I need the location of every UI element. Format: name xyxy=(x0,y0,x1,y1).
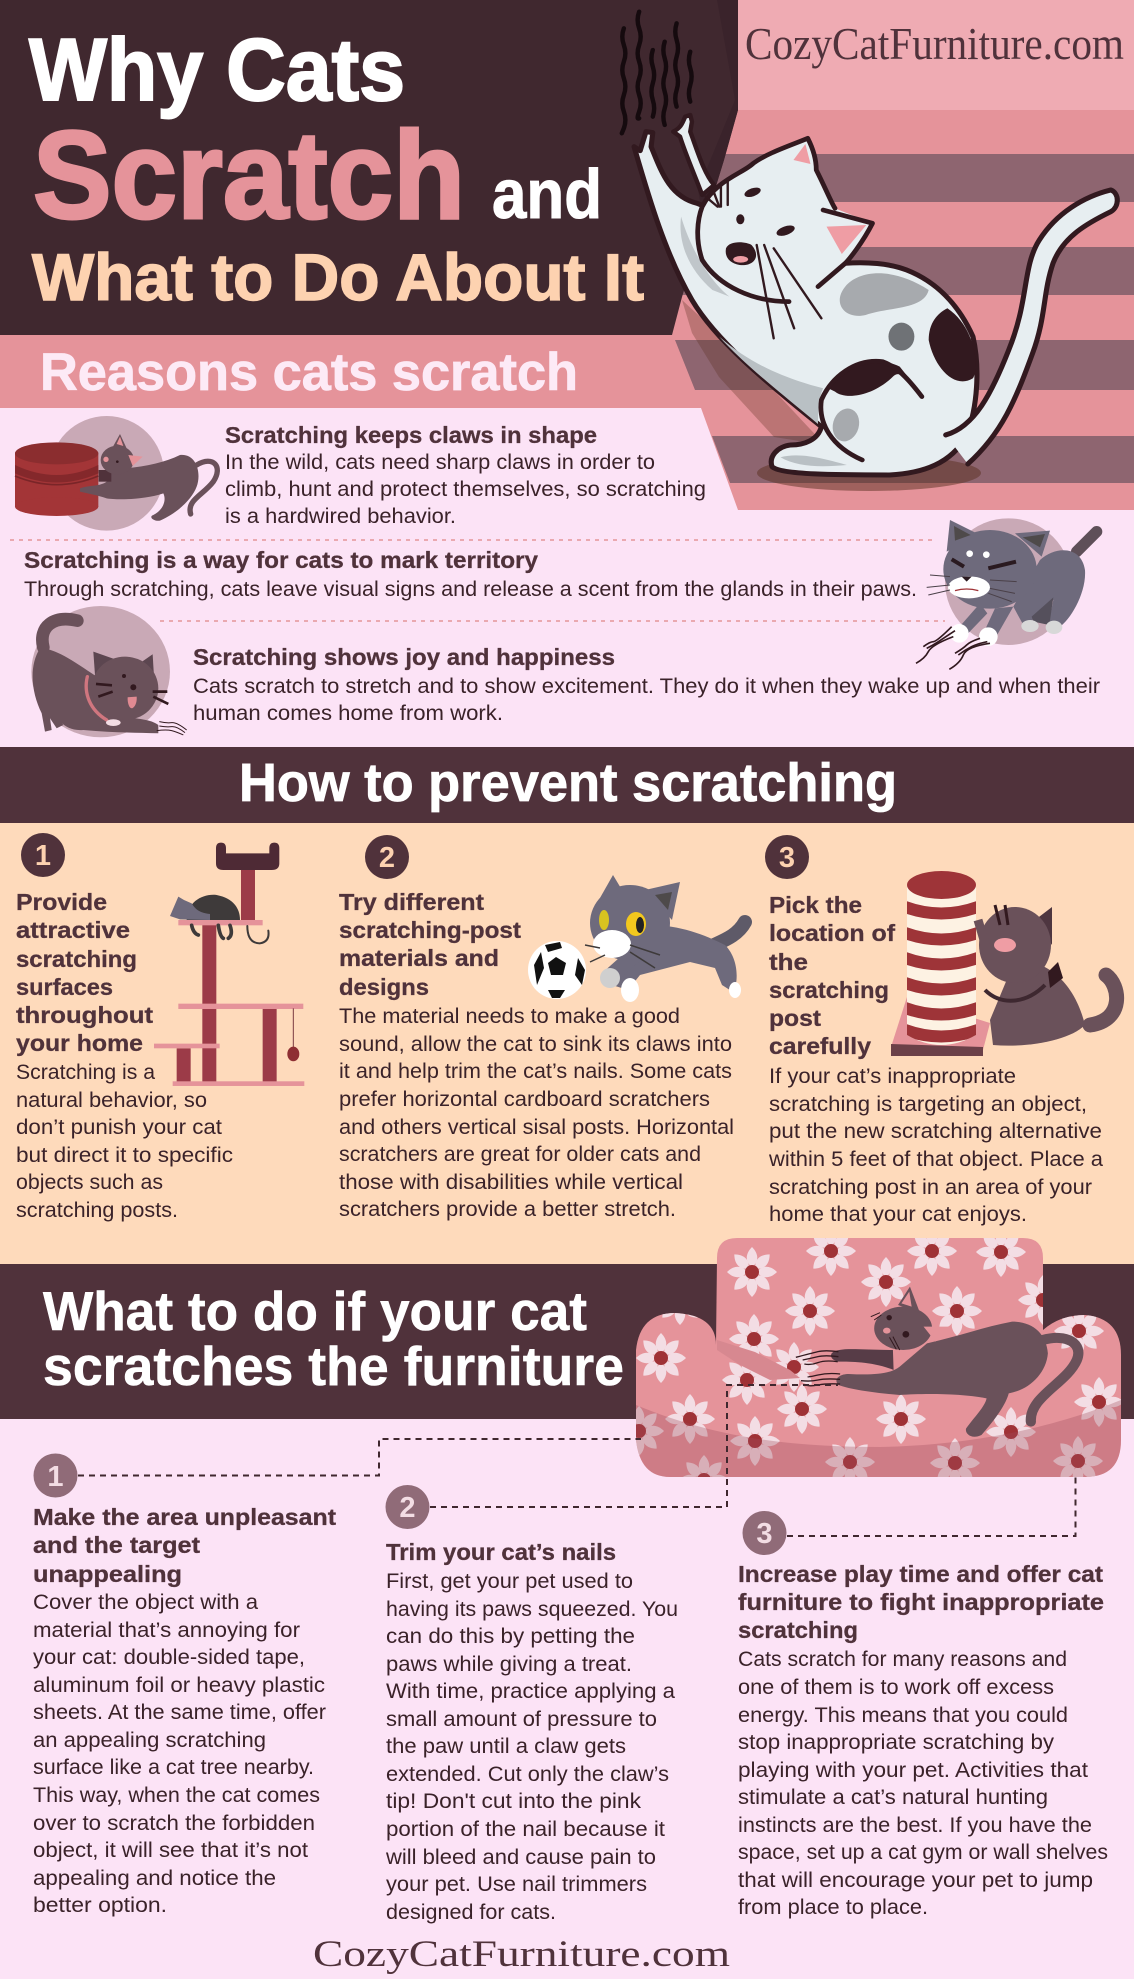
reason 3: joy and happiness xyxy=(31,606,1100,737)
heading: your home xyxy=(16,1030,143,1056)
heading: post xyxy=(769,1005,821,1031)
body text: designed for cats. xyxy=(386,1901,556,1924)
body text: human comes home from work. xyxy=(193,702,503,725)
body text: can do this by petting the xyxy=(386,1625,635,1648)
title line: and: and xyxy=(492,155,602,233)
body text: stimulate a cat’s natural hunting xyxy=(738,1786,1048,1809)
step 1: attractive surfaces xyxy=(16,833,304,1222)
number badge: 2 xyxy=(399,1492,416,1524)
back leg line xyxy=(821,361,922,460)
body text: your pet. Use nail trimmers xyxy=(386,1873,647,1896)
number badge: 3 xyxy=(756,1518,773,1550)
icon: cat scratching sofa xyxy=(796,1287,1078,1437)
body text xyxy=(225,451,706,528)
step 3: location of post xyxy=(765,835,1117,1226)
body text: stop inappropriate scratching by xyxy=(738,1731,1055,1754)
heading: Make the area unpleasant xyxy=(33,1504,336,1530)
body text: scratchers provide a better stretch. xyxy=(339,1198,676,1221)
heading xyxy=(738,1561,1104,1643)
icon: striped scratching post xyxy=(891,871,990,1056)
body text: but direct it to specific xyxy=(16,1144,233,1167)
body shading xyxy=(680,217,729,297)
body text xyxy=(339,1005,734,1221)
body text: one of them is to work off excess xyxy=(738,1676,1054,1699)
heading: carefully xyxy=(769,1033,871,1059)
body text: those with disabilities while vertical xyxy=(339,1171,683,1194)
header dark panel xyxy=(0,0,738,335)
heading xyxy=(339,889,521,1000)
body text: prefer horizontal cardboard scratchers xyxy=(339,1088,710,1111)
step 3: play time and furniture xyxy=(738,1511,1108,1919)
step 2: trim nails xyxy=(385,1485,678,1924)
heading: Scratching shows joy and happiness xyxy=(193,644,615,670)
icon: grey cat pouncing with claws xyxy=(916,518,1097,669)
body text: extended. Cut only the claw’s xyxy=(386,1763,669,1786)
body text: home that your cat enjoys. xyxy=(769,1203,1027,1226)
body text: portion of the nail because it xyxy=(386,1818,665,1841)
heading: Try different xyxy=(339,889,484,915)
number badge xyxy=(34,1454,78,1498)
body text: With time, practice applying a xyxy=(386,1680,675,1703)
body text: from place to place. xyxy=(738,1896,928,1919)
site name footer: CozyCatFurniture.com xyxy=(313,1934,730,1975)
heading: scratches the furniture xyxy=(43,1335,624,1397)
body text xyxy=(16,1061,233,1222)
whiskers xyxy=(706,182,821,338)
heading: location of xyxy=(769,920,895,946)
icon: stretching cat xyxy=(31,606,187,737)
body text: put the new scratching alternative xyxy=(769,1120,1102,1143)
body text: First, get your pet used to xyxy=(386,1570,633,1593)
body text: Cover the object with a xyxy=(33,1591,258,1614)
body text: objects such as xyxy=(16,1171,163,1194)
icon: grey cat chasing ball xyxy=(585,875,745,1002)
body text: appealing and notice the xyxy=(33,1867,276,1890)
body text: object, it will see that it’s not xyxy=(33,1839,308,1862)
body text: having its paws squeezed. You xyxy=(386,1598,678,1621)
connector: dashed lines to sofa xyxy=(78,1385,1076,1536)
number badge xyxy=(365,835,409,879)
step 2: different materials xyxy=(339,835,745,1221)
body text: scratchers are great for older cats and xyxy=(339,1143,701,1166)
body text: This way, when the cat comes xyxy=(33,1784,320,1807)
head xyxy=(698,138,872,302)
body text: within 5 feet of that object. Place a xyxy=(768,1148,1103,1171)
heading: throughout xyxy=(16,1002,153,1028)
title xyxy=(29,20,644,314)
body text: energy. This means that you could xyxy=(738,1704,1068,1727)
number badge: 3 xyxy=(779,842,795,874)
heading: and the target xyxy=(33,1532,200,1558)
far arm xyxy=(673,115,714,195)
heading: Scratching keeps claws in shape xyxy=(225,422,597,448)
heading: furniture to fight inappropriate xyxy=(738,1589,1104,1615)
heading: Trim your cat’s nails xyxy=(386,1539,616,1565)
heading: What to do if your cat xyxy=(43,1280,587,1342)
heading: Provide xyxy=(16,889,107,915)
section band: What to do if your cat scratches the furniture xyxy=(0,1264,1134,1419)
heading xyxy=(16,889,153,1056)
body text: Cats scratch to stretch and to show excitement. They do it when they wake up and when their xyxy=(193,675,1100,698)
head outline xyxy=(698,138,872,302)
heading xyxy=(769,892,895,1059)
title line: Why Cats: Why Cats xyxy=(29,20,405,119)
body text: and others vertical sisal posts. Horizontal xyxy=(339,1116,734,1139)
body text: scratching posts. xyxy=(16,1199,178,1222)
body text: that will encourage your pet to jump xyxy=(738,1869,1093,1892)
heading: Reasons cats scratch: Reasons cats scratch xyxy=(40,343,578,402)
body text: The material needs to make a good xyxy=(339,1005,680,1028)
heading: Pick the xyxy=(769,892,862,918)
body text: instincts are the best. If you have the xyxy=(738,1814,1092,1837)
heading: materials and xyxy=(339,945,499,971)
body text: over to scratch the forbidden xyxy=(33,1812,315,1835)
reason 1: keeps claws in shape xyxy=(15,416,706,531)
body text: sheets. At the same time, offer xyxy=(33,1701,326,1724)
reason 2: mark territory xyxy=(24,547,917,601)
body text: don’t punish your cat xyxy=(16,1116,222,1139)
number badge xyxy=(742,1511,786,1555)
body text: Through scratching, cats leave visual signs and release a scent from the glands in their paws. xyxy=(24,578,917,601)
body text: In the wild, cats need sharp claws in order to xyxy=(225,451,655,474)
body text: small amount of pressure to xyxy=(386,1708,657,1731)
body text xyxy=(33,1591,326,1917)
body text: aluminum foil or heavy plastic xyxy=(33,1674,325,1697)
icon: cat scratching red drum xyxy=(15,416,217,531)
number badge: 1 xyxy=(35,840,51,872)
number badge xyxy=(386,1485,430,1529)
heading: unappealing xyxy=(33,1561,182,1587)
number badge: 1 xyxy=(47,1461,64,1493)
icon: cat using scratching post xyxy=(978,905,1117,1046)
body text: surface like a cat tree nearby. xyxy=(33,1756,314,1779)
body xyxy=(634,132,977,475)
body text: better option. xyxy=(33,1894,167,1917)
tail xyxy=(946,190,1117,464)
scratch marks on wall xyxy=(622,12,692,133)
heading: scratching xyxy=(16,946,137,972)
body text: climb, hunt and protect themselves, so scratching xyxy=(225,478,706,501)
icon: cat shadow xyxy=(682,300,981,491)
step 1: make area unpleasant xyxy=(33,1454,336,1917)
icon: large white cat scratching xyxy=(622,12,1117,475)
body text: your cat: double-sided tape, xyxy=(33,1646,305,1669)
heading xyxy=(43,1280,624,1397)
body text: natural behavior, so xyxy=(16,1089,207,1112)
header stripes background xyxy=(0,0,1134,510)
body text: space, set up a cat gym or wall shelves xyxy=(738,1841,1108,1864)
body text: scratching is targeting an object, xyxy=(769,1093,1087,1116)
body text: tip! Don't cut into the pink xyxy=(386,1790,642,1813)
heading: scratching xyxy=(769,977,889,1003)
heading: Increase play time and offer cat xyxy=(738,1561,1103,1587)
body text: Scratching is a xyxy=(16,1061,155,1084)
illustration: flowered sofa xyxy=(636,1238,1121,1477)
body text xyxy=(193,675,1100,725)
number badge: 2 xyxy=(379,842,395,874)
icon: cat tree with cat xyxy=(154,843,304,1086)
sofa flowers xyxy=(636,1238,1121,1477)
icon: soccer ball xyxy=(528,941,586,999)
number badge xyxy=(765,835,809,879)
body text: the paw until a claw gets xyxy=(386,1735,626,1758)
body text: playing with your pet. Activities that xyxy=(738,1759,1088,1782)
heading: How to prevent scratching xyxy=(239,753,897,813)
body text xyxy=(768,1065,1103,1226)
body text xyxy=(738,1648,1108,1919)
heading: designs xyxy=(339,974,429,1000)
body text: is a hardwired behavior. xyxy=(225,505,456,528)
panel: prevention steps xyxy=(0,823,1134,1264)
heading: Scratching is a way for cats to mark territory xyxy=(24,547,538,573)
heading: scratching-post xyxy=(339,917,521,943)
body text: paws while giving a treat. xyxy=(386,1653,632,1676)
body text xyxy=(385,1570,678,1924)
body text: scratching post in an area of your xyxy=(769,1176,1092,1199)
body spots xyxy=(840,273,929,316)
body text: will bleed and cause pain to xyxy=(385,1846,656,1869)
body text: an appealing scratching xyxy=(33,1729,266,1752)
body text: If your cat’s inappropriate xyxy=(769,1065,1016,1088)
title line: Scratch: Scratch xyxy=(33,107,465,245)
number badge xyxy=(21,833,65,877)
body text: sound, allow the cat to sink its claws into xyxy=(339,1033,732,1056)
face xyxy=(743,186,762,199)
title line: What to Do About It: What to Do About It xyxy=(32,240,644,314)
heading: surfaces xyxy=(16,974,113,1000)
body text: material that’s annoying for xyxy=(33,1619,300,1642)
panel: reasons xyxy=(0,408,1134,747)
body text: Cats scratch for many reasons and xyxy=(738,1648,1067,1671)
heading: the xyxy=(769,949,808,975)
ear inner xyxy=(793,144,810,164)
heading xyxy=(33,1504,336,1587)
heading: attractive xyxy=(16,917,130,943)
body text: it and help trim the cat’s nails. Some cats xyxy=(339,1060,732,1083)
section band: How to prevent scratching xyxy=(0,747,1134,823)
heading: scratching xyxy=(738,1617,858,1643)
